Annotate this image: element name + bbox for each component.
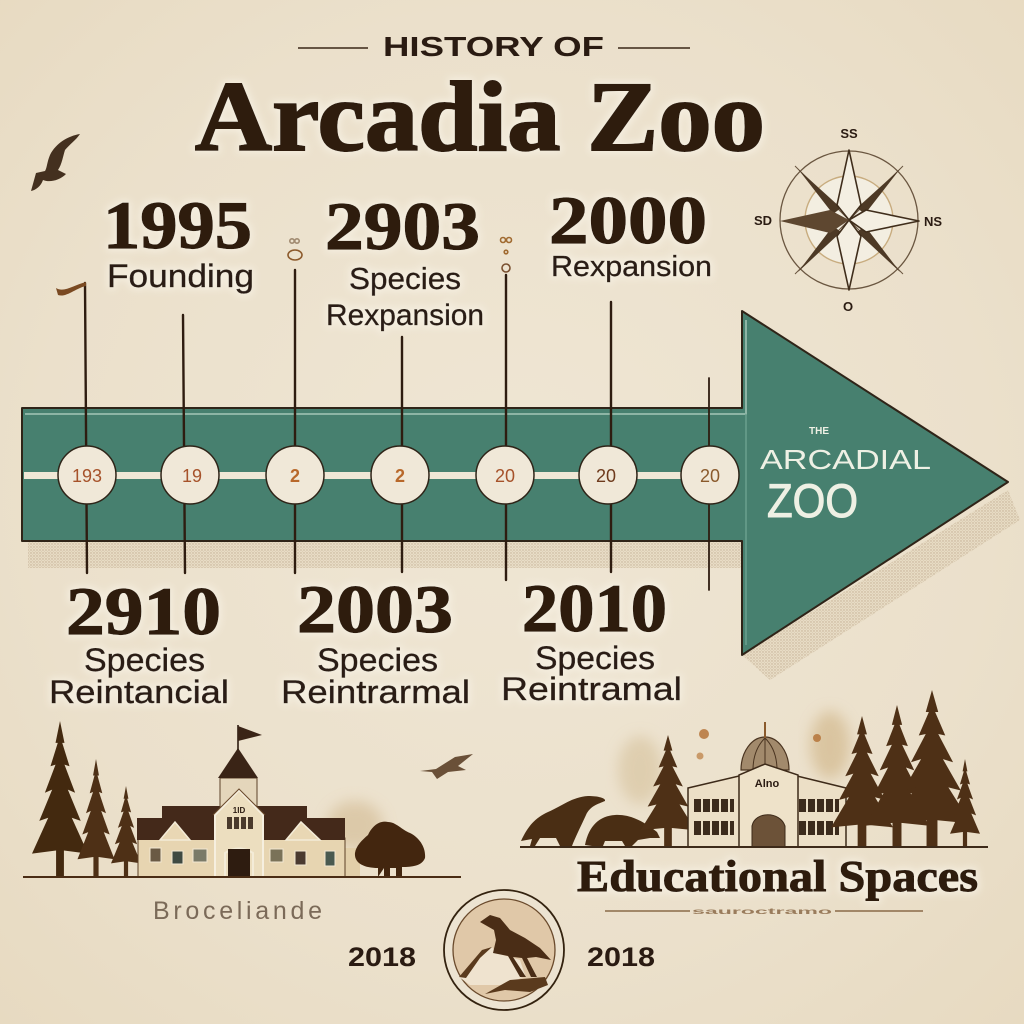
- museum building: [688, 722, 846, 847]
- milestone: 2000 expansion: 2000: [549, 182, 707, 258]
- milestone: 2000 expansion: Rexpansion: [551, 251, 712, 283]
- icon: compass: [754, 126, 942, 314]
- museum building: Alno: [755, 778, 779, 790]
- icon: marker above third stem: [500, 238, 512, 272]
- milestone: 2010 species: 2010: [522, 570, 667, 646]
- milestone: 2003 species: Reintrarmal: [281, 674, 470, 710]
- illustration: left school scene: [23, 721, 461, 878]
- timeline nodes: 2: [395, 466, 405, 486]
- timeline arrow: [22, 311, 1008, 655]
- timeline stems: [85, 270, 709, 590]
- timeline nodes: 20: [495, 466, 515, 486]
- milestone: 1995 founding: Founding: [107, 258, 254, 294]
- icon: compass: SD: [754, 213, 772, 228]
- milestone: 2003 species: 2003: [297, 571, 453, 647]
- milestone: 2010 species: Reintramal: [501, 671, 682, 707]
- label: 2018 left: 2018: [348, 942, 416, 972]
- timeline nodes: 19: [182, 466, 202, 486]
- divider caption: sauroctramo: [692, 907, 832, 916]
- icon: marker above second stem: [288, 239, 302, 260]
- icon: compass: SS: [840, 126, 858, 141]
- school building: 1ID: [233, 806, 245, 815]
- milestone: 2903 species rexpansion: 2903: [325, 188, 480, 264]
- title: history of: HISTORY OF: [383, 31, 604, 62]
- arrow label: ZOO: [767, 474, 858, 527]
- timeline nodes: [58, 446, 739, 504]
- milestone: 2910 species: [49, 573, 229, 710]
- timeline nodes: 20: [700, 466, 720, 486]
- milestone: 2903 species rexpansion: Species: [349, 261, 461, 296]
- arrow label: [760, 426, 931, 527]
- arrow label: ARCADIAL: [760, 444, 931, 475]
- label: broceliande: Broceliande: [153, 897, 322, 925]
- ground line: [520, 846, 988, 848]
- timeline nodes: 193: [72, 466, 102, 486]
- title: arcadia zoo: Arcadia Zoo: [195, 61, 765, 172]
- round tree: [355, 822, 425, 877]
- label: educational spaces: Educational Spaces: [577, 852, 978, 901]
- medallion: [444, 890, 564, 1010]
- ground line: [23, 876, 461, 878]
- illustration: right museum scene: [520, 690, 988, 848]
- animals: [521, 796, 660, 846]
- timeline bar: [24, 472, 714, 479]
- milestone: 2903 species rexpansion: [325, 188, 484, 332]
- arrow shadow: [28, 490, 1020, 680]
- milestone: 1995 founding: 1995: [103, 187, 252, 263]
- milestone: 2000 expansion: [549, 182, 712, 283]
- milestone: 2903 species rexpansion: Rexpansion: [326, 299, 484, 332]
- school building: [137, 725, 360, 877]
- label: 2018 right: 2018: [587, 942, 655, 972]
- timeline nodes: 20: [596, 466, 616, 486]
- milestone: 2010 species: Species: [535, 640, 655, 676]
- milestone: 2003 species: [281, 571, 470, 710]
- icon: flying bird: [420, 754, 473, 779]
- timeline nodes: 2: [290, 466, 300, 486]
- milestone: 2003 species: Species: [317, 642, 438, 678]
- arrow label: THE: [809, 426, 829, 437]
- icon: compass: NS: [924, 214, 942, 229]
- icon: bird top left: [31, 134, 80, 191]
- milestone: 2010 species: [501, 570, 682, 707]
- icon: small flag on first stem: [56, 282, 86, 296]
- milestone: 1995 founding: [103, 187, 254, 294]
- icon: compass: O: [843, 299, 853, 314]
- milestone: 2910 species: 2910: [66, 573, 221, 649]
- milestone: 2910 species: Reintancial: [49, 674, 229, 710]
- milestone: 2910 species: Species: [84, 642, 205, 678]
